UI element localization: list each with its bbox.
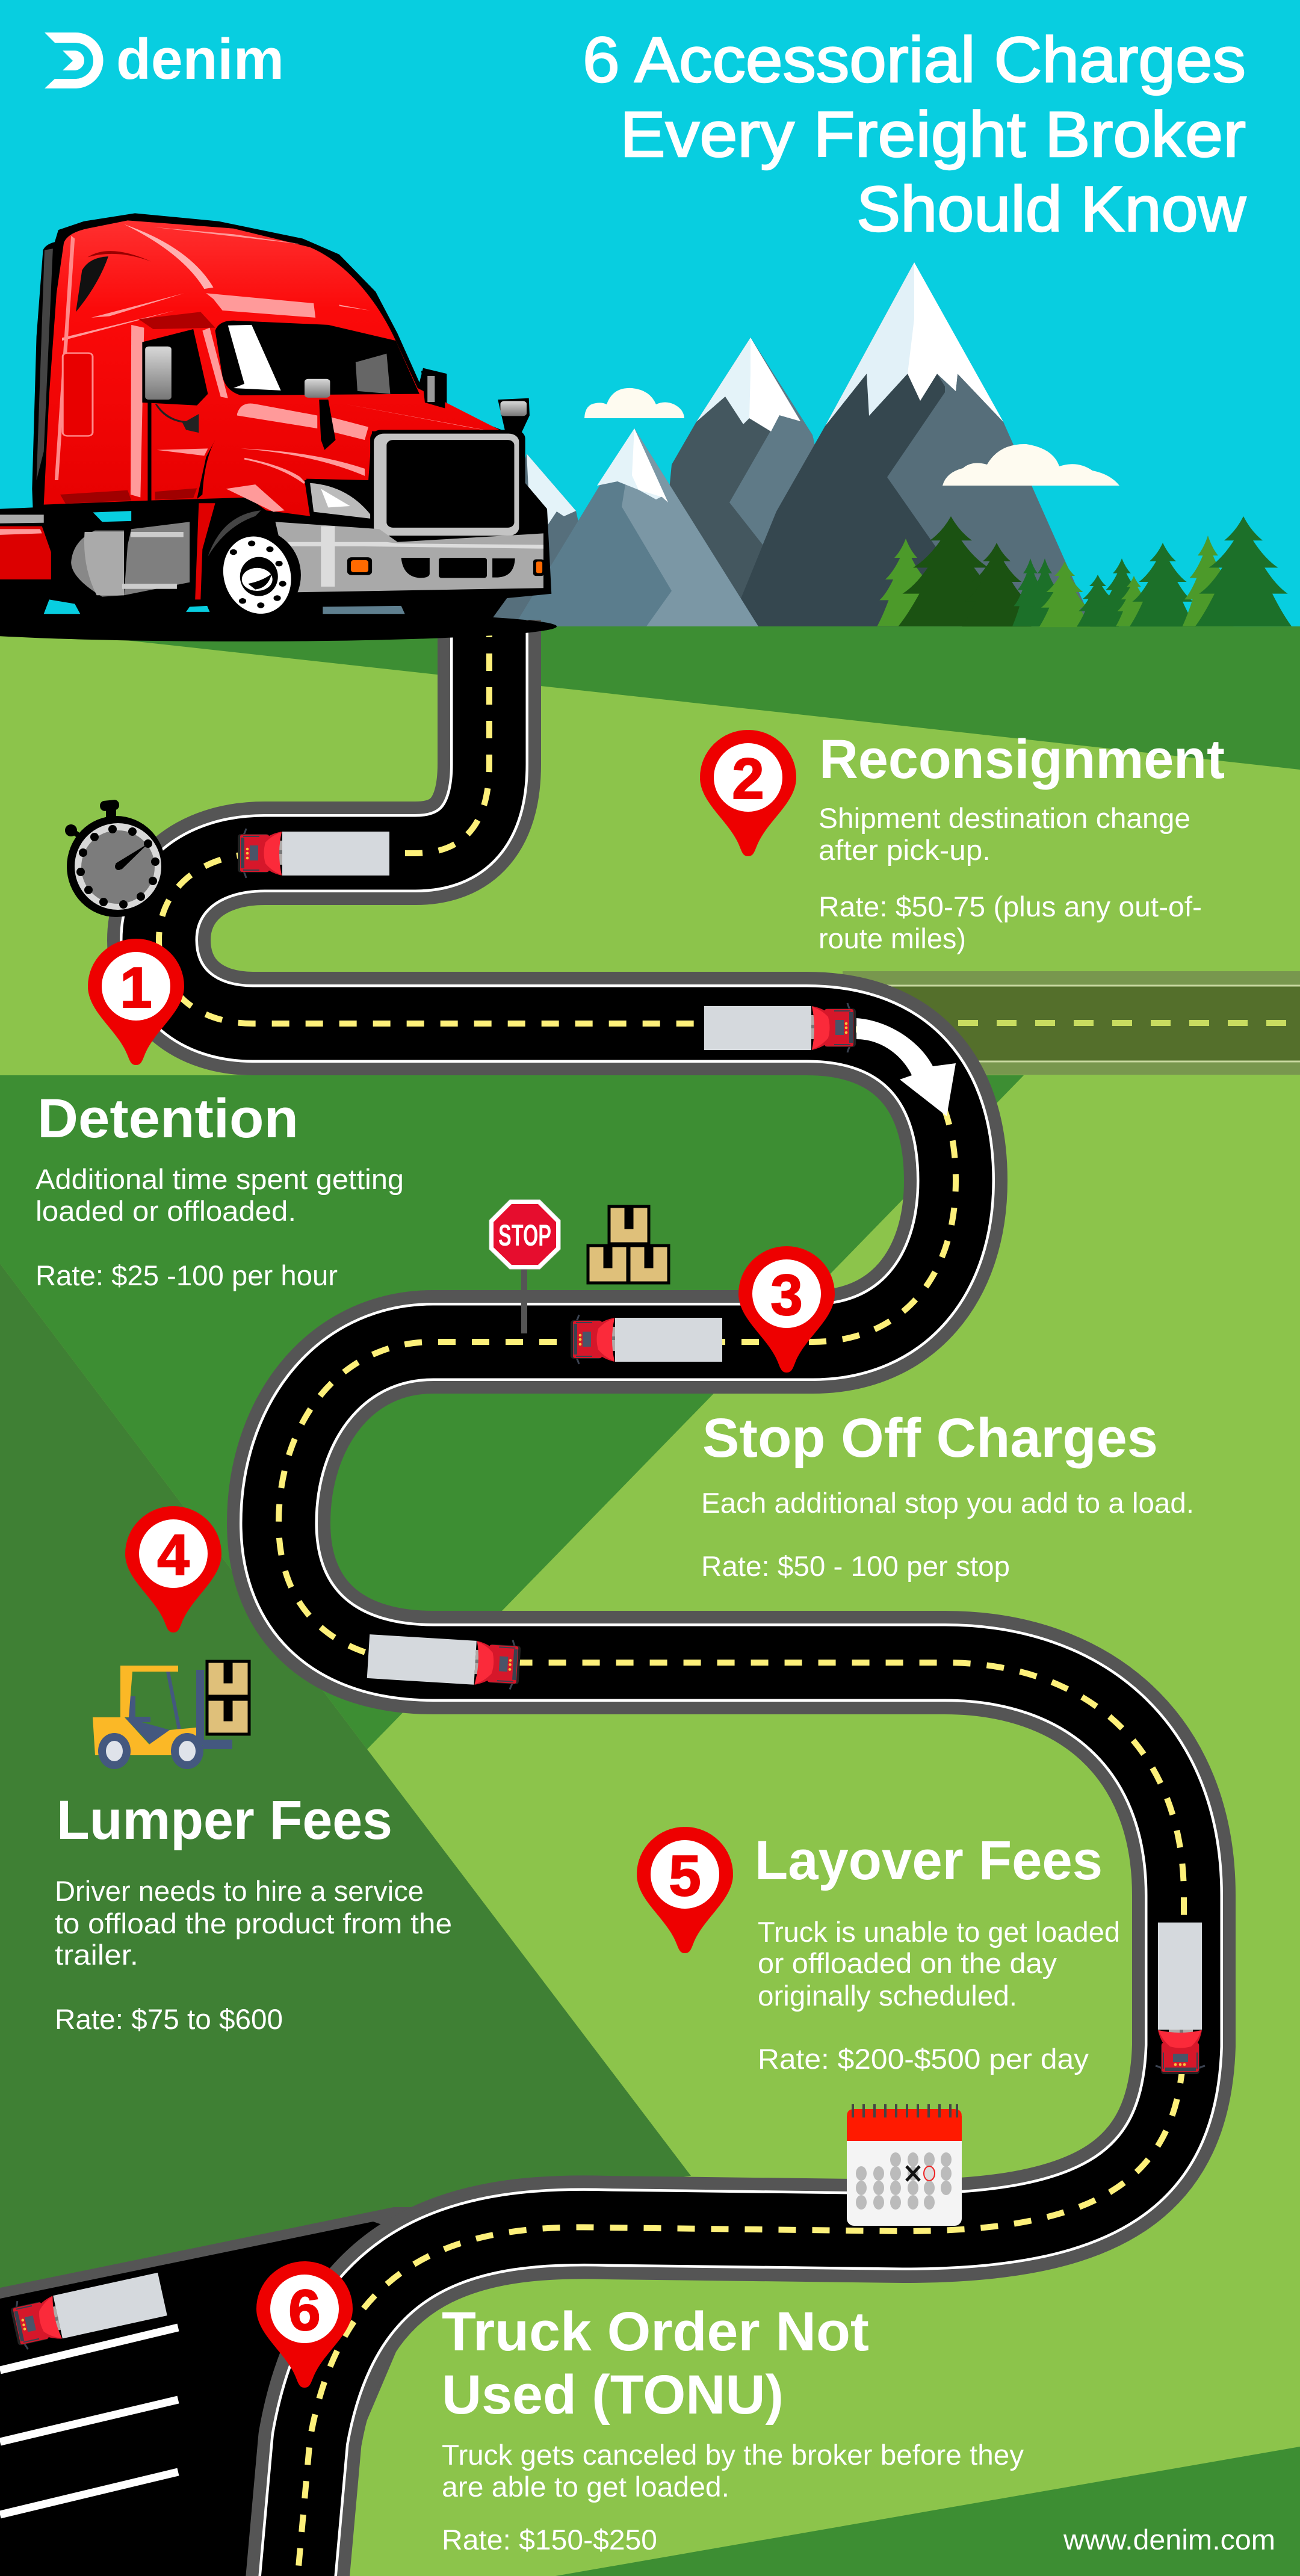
title: Every Freight Broker (620, 98, 1246, 170)
panel: Lumper Fees (55, 1790, 452, 2035)
logo icon (45, 32, 104, 88)
heading: Stop Off Charges: Stop Off Charges (702, 1407, 1158, 1469)
text: TONU description and rate (442, 2439, 1024, 2556)
text: Lumper Fees description and rate: trailer. (55, 1939, 138, 1971)
mountains (481, 262, 1094, 626)
pin 3 (738, 1246, 835, 1373)
text: Reconsignment description and rate: Shipment destination change (819, 802, 1190, 834)
text: Layover Fees description and rate (758, 1916, 1120, 2075)
panel: Detention (36, 1088, 404, 1291)
panel: Truck Order Not Used (442, 2301, 1024, 2556)
panel: Stop Off Charges (701, 1407, 1194, 1582)
red semi truck illustration (0, 213, 551, 621)
title: 6 Accessorial Charges (583, 23, 1246, 96)
pin 1: 1 (120, 956, 152, 1020)
heading: Lumper Fees: Lumper Fees (57, 1790, 392, 1851)
clouds (584, 388, 1119, 486)
text: TONU description and rate: are able to get loaded. (442, 2471, 729, 2503)
winding road (159, 620, 1184, 2576)
pin 5 (637, 1827, 733, 1953)
text: Stop Off description and rate (701, 1487, 1194, 1582)
text: Lumper Fees description and rate: to offload the product from the (55, 1907, 452, 1939)
pin 2: 2 (732, 747, 764, 811)
heading: Truck Order Not Used (TONU): Used (TONU) (442, 2364, 784, 2426)
text: Detention description and rate: Rate: $25 -100 per hour (36, 1259, 338, 1291)
arrow: curved white direction arrow (856, 1018, 956, 1116)
panel: Reconsignment (819, 729, 1225, 954)
text: Layover Fees description and rate: originally scheduled. (758, 1980, 1017, 2012)
pin 4 (125, 1506, 221, 1632)
parking lot with truck (0, 2207, 457, 2576)
text: Lumper Fees description and rate (55, 1875, 452, 2035)
website url: www.denim.com (1063, 2524, 1275, 2556)
text: Stop Off description and rate: Each additional stop you add to a load. (701, 1487, 1194, 1519)
text: Reconsignment description and rate (819, 802, 1202, 954)
heading: Reconsignment: Reconsignment (819, 729, 1225, 790)
pin 6: 6 (288, 2278, 321, 2343)
heading: Truck Order Not Used (TONU) (442, 2301, 869, 2426)
stop sign: STOP (498, 1219, 551, 1252)
map pins (88, 730, 835, 2388)
text: Reconsignment description and rate: after pick-up. (819, 834, 991, 866)
pin 3: 3 (770, 1263, 803, 1327)
text: Reconsignment description and rate: Rate: $50-75 (plus any out-of- (819, 891, 1202, 922)
text: Stop Off description and rate: Rate: $50 - 100 per stop (701, 1550, 1010, 1582)
heading: Truck Order Not Used (TONU): Truck Order Not (442, 2301, 869, 2362)
text: Layover Fees description and rate: Rate: $200-$500 per day (758, 2043, 1089, 2075)
stop sign (489, 1200, 560, 1333)
logo (45, 27, 284, 91)
heading: Layover Fees: Layover Fees (755, 1830, 1103, 1891)
panel: Layover Fees (755, 1830, 1120, 2075)
text: TONU description and rate: Rate: $150-$250 (442, 2524, 657, 2556)
title (583, 23, 1246, 245)
pin 5: 5 (669, 1844, 701, 1908)
pin 2 (700, 730, 796, 856)
text: Detention description and rate (36, 1163, 404, 1291)
icon: stacked boxes (588, 1206, 669, 1283)
title: Should Know (856, 173, 1246, 245)
pin 4: 4 (157, 1523, 190, 1587)
side road (843, 971, 1300, 1075)
logo wordmark: denim (116, 27, 284, 91)
icon: stopwatch (65, 799, 166, 917)
text: Reconsignment description and rate: route miles) (819, 922, 966, 954)
icon: forklift with boxes (93, 1661, 249, 1769)
tree line (878, 516, 1292, 627)
text: Detention description and rate: loaded or offloaded. (36, 1195, 296, 1227)
heading: Detention: Detention (37, 1088, 299, 1149)
icon: calendar (847, 2104, 962, 2226)
pin 1 (88, 939, 184, 1065)
truck shadow ellipse (0, 611, 557, 641)
delivery trucks on the road (9, 829, 1205, 2351)
text: Lumper Fees description and rate: Rate: $75 to $600 (55, 2003, 283, 2035)
text: Layover Fees description and rate: Truck is unable to get loaded (758, 1916, 1120, 1948)
text: Lumper Fees description and rate: Driver needs to hire a service (55, 1875, 424, 1907)
text: Detention description and rate: Additional time spent getting (36, 1163, 404, 1195)
text: Layover Fees description and rate: or offloaded on the day (758, 1947, 1057, 1979)
text: TONU description and rate: Truck gets canceled by the broker before they (442, 2439, 1024, 2471)
pin 6 (256, 2261, 353, 2388)
